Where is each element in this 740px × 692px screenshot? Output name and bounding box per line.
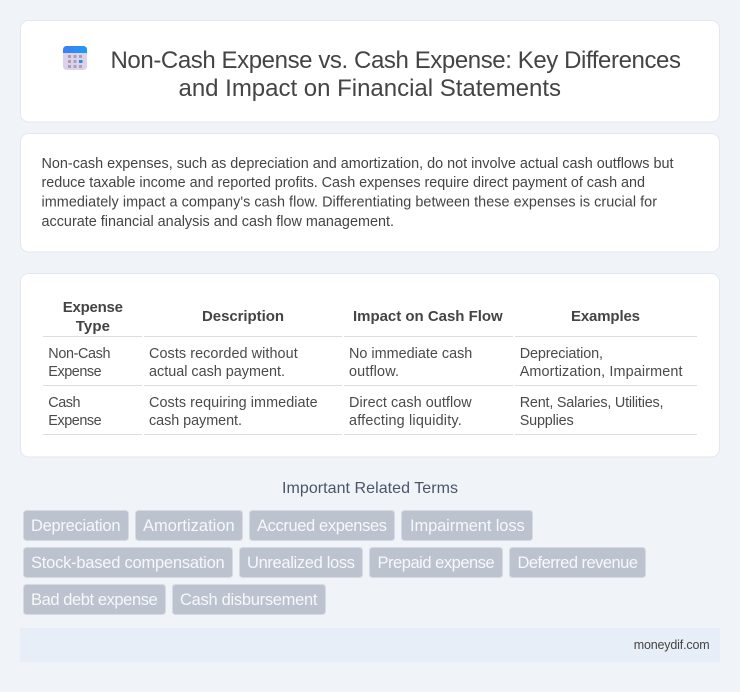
table row: cash expense: Direct cash outflow [349,395,472,411]
footer bar [20,628,720,662]
tag list: related terms [24,510,646,614]
panel: comparison table [20,274,720,457]
tag: Stock-based compensation [24,548,232,578]
title [110,47,681,102]
table row: non-cash expense: outflow. [349,364,399,380]
table row: cash expense: Costs requiring immediate [149,395,318,411]
tag: Amortization [136,510,242,540]
tag: Deferred revenue [510,548,646,578]
title: Non-Cash Expense vs. Cash Expense: Key Differences [110,47,681,74]
panel: header [20,20,720,122]
table header row: Description [202,308,284,325]
summary text: accurate financial analysis and cash flow management. [42,214,394,230]
table header row: Type [76,318,110,335]
table row: non-cash expense: Costs recorded without [149,346,298,362]
table row: non-cash expense: Depreciation, [520,346,603,362]
tag: Unrealized loss [240,548,362,578]
icon: calendar [63,46,87,70]
heading: related terms: Important Related Terms [282,480,458,497]
table row: cash expense: Cash [48,395,80,411]
panel: summary paragraph [20,134,720,252]
table row: cash expense: cash payment. [149,413,242,429]
tag: Bad debt expense: Bad debt expense [31,591,158,609]
tag: Deferred revenue: Deferred revenue [518,554,638,572]
title: and Impact on Financial Statements [178,75,561,102]
summary text: Non-cash expenses, such as depreciation and amortization, do not involve actual cash outflows but [42,156,674,172]
table row: non-cash expense: Amortization, Impairment [520,364,682,380]
table row: non-cash expense: Non-Cash [48,346,110,362]
table header row: Impact on Cash Flow [353,308,503,325]
tag: Depreciation [24,510,128,540]
summary text [42,156,674,230]
tag: Cash disbursement [172,584,326,614]
tag: Depreciation: Depreciation [31,517,120,535]
table header row: Expense [63,299,123,316]
tag: Impairment loss [402,510,532,540]
summary text: reduce taxable income and reported profits. Cash expenses require direct payment of cash and [42,175,645,191]
tag: Accrued expenses: Accrued expenses [257,517,387,535]
tag: Prepaid expense: Prepaid expense [378,554,495,572]
summary text: immediately impact a company's cash flow. Differentiating between these expenses is crucial for [42,194,657,210]
tag: Impairment loss: Impairment loss [410,517,525,535]
tag: Cash disbursement: Cash disbursement [180,591,318,609]
table row: cash expense [48,395,664,429]
tag: Stock-based compensation: Stock-based compensation [31,554,225,572]
table header row: Examples [571,308,640,325]
tag: Accrued expenses [250,510,394,540]
tag: Amortization: Amortization [143,517,235,535]
tag: Bad debt expense [24,584,166,614]
tag: Unrealized loss: Unrealized loss [247,554,355,572]
table row: cash expense: affecting liquidity. [349,413,462,429]
table row: non-cash expense: actual cash payment. [149,364,285,380]
tag: Prepaid expense [370,548,502,578]
table row: non-cash expense [48,346,683,380]
table row: cash expense: Supplies [520,413,574,429]
table header row [63,299,640,335]
table row: cash expense: Expense [48,413,102,429]
table row: non-cash expense: No immediate cash [349,346,472,362]
footer source text: moneydif.com [634,638,710,652]
table row: non-cash expense: Expense [48,364,102,380]
table row: cash expense: Rent, Salaries, Utilities, [520,395,664,411]
